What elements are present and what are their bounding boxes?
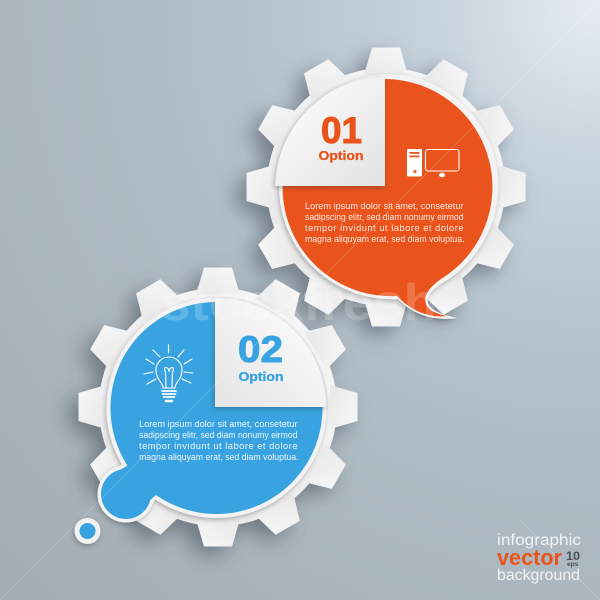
panel: option 02 thought bubble (74, 298, 326, 544)
footer logo text: vector (497, 545, 562, 570)
bubble outline (279, 74, 498, 319)
orange bubble fill (283, 79, 492, 316)
white quarter panel (275, 77, 385, 186)
text block 02: Lorem ipsum dolor sit amet, consetetur (139, 419, 298, 429)
footer logo text: infographic (497, 532, 581, 549)
gear 2 (78, 268, 358, 546)
footer logo text: background (497, 567, 580, 584)
text block 02: sadipscing elitr, sed diam nonumy eirmod (139, 430, 298, 440)
icon: light bulb (144, 345, 193, 401)
text block 02: tempor invidunt ut labore et dolore (139, 441, 298, 451)
footer logo text: eps (567, 561, 579, 568)
small thought dot (74, 518, 100, 544)
text block 01: sadipscing elitr, sed diam nonumy eirmod (305, 212, 464, 222)
footer logo text (497, 532, 581, 584)
text block 01: magna aliquyam erat, sed diam voluptua. (305, 234, 464, 244)
number 02: 02 (238, 329, 283, 370)
blue bubble fill (101, 302, 322, 519)
text block 02: magna aliquyam erat, sed diam voluptua. (139, 452, 298, 462)
text block 01: tempor invidunt ut labore et dolore (305, 223, 464, 233)
text block 02 (139, 419, 298, 462)
text block 01: Lorem ipsum dolor sit amet, consetetur (305, 201, 464, 211)
gear 1 (246, 48, 526, 326)
white quarter panel (215, 298, 326, 407)
footer logo text: 10 (566, 549, 580, 563)
label option: Option (238, 370, 284, 384)
bubble outline (98, 298, 326, 522)
watermark: stockfresh (160, 274, 437, 332)
panel: option 01 speech bubble (275, 74, 498, 319)
icon: computer (407, 149, 459, 177)
number 01: 01 (321, 110, 362, 151)
text block 01 (305, 201, 464, 244)
label option: Option (318, 149, 364, 163)
